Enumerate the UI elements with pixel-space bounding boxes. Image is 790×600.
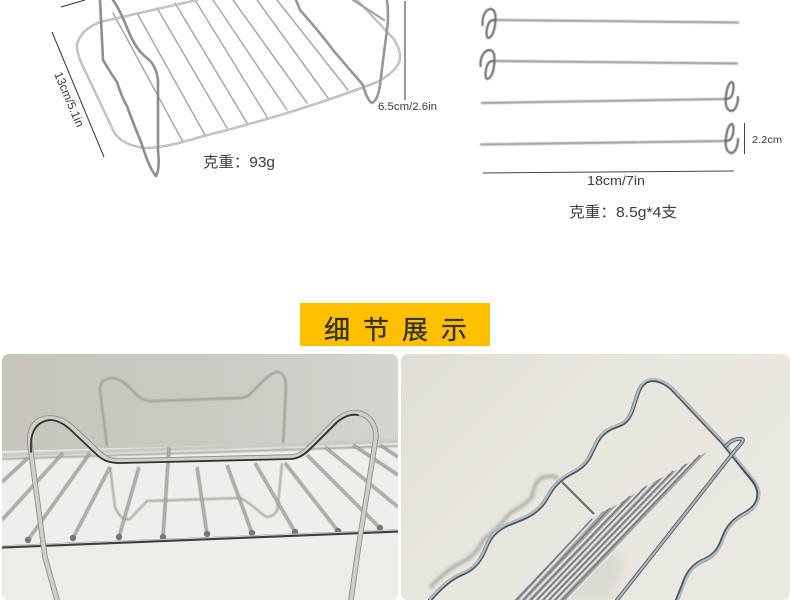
rack outer rim	[77, 0, 400, 148]
blurred back wire	[430, 476, 558, 588]
label: 18cm/7in: 18cm/7in	[587, 173, 645, 188]
photo: side view of rack	[401, 354, 790, 600]
front wire handle	[30, 413, 376, 600]
rack wire frame	[77, 0, 400, 176]
rod shadow	[570, 552, 622, 599]
rack crossbars	[113, 0, 348, 142]
heading text: 细节展示	[324, 315, 480, 345]
dimension line: depth	[52, 32, 104, 157]
photo: front view of rack	[2, 354, 398, 600]
skewer 4	[481, 124, 738, 153]
grid rods	[2, 445, 398, 540]
front crossbar	[2, 530, 398, 547]
label: skewer weight: 克重：8.5g*4支	[569, 204, 677, 221]
rod tips	[25, 525, 383, 543]
skewer 3	[482, 82, 738, 111]
label: 2.2cm: 2.2cm	[752, 134, 782, 146]
dimension line: length	[483, 171, 734, 173]
skewer 2	[480, 50, 737, 79]
label: 6.5cm/2.6in: 6.5cm/2.6in	[378, 101, 437, 113]
skewer 1	[482, 9, 738, 38]
label: rack weight: 克重：93g	[203, 154, 275, 171]
product: four skewers with dimensions	[480, 9, 782, 221]
dimension line: loop size	[744, 123, 746, 154]
front rail loop	[617, 439, 743, 600]
heading banner	[300, 303, 490, 346]
label: 13cm/5.1in: 13cm/5.1in	[51, 70, 87, 129]
dimension line: height	[404, 1, 406, 100]
back crossbars	[2, 441, 398, 459]
rod bundle	[513, 450, 710, 600]
front wavy wire	[430, 379, 759, 600]
right support	[296, 0, 388, 103]
back strut	[562, 482, 594, 514]
left support	[100, 0, 159, 176]
background wire	[100, 372, 286, 520]
product: rack with dimensions	[51, 0, 437, 176]
